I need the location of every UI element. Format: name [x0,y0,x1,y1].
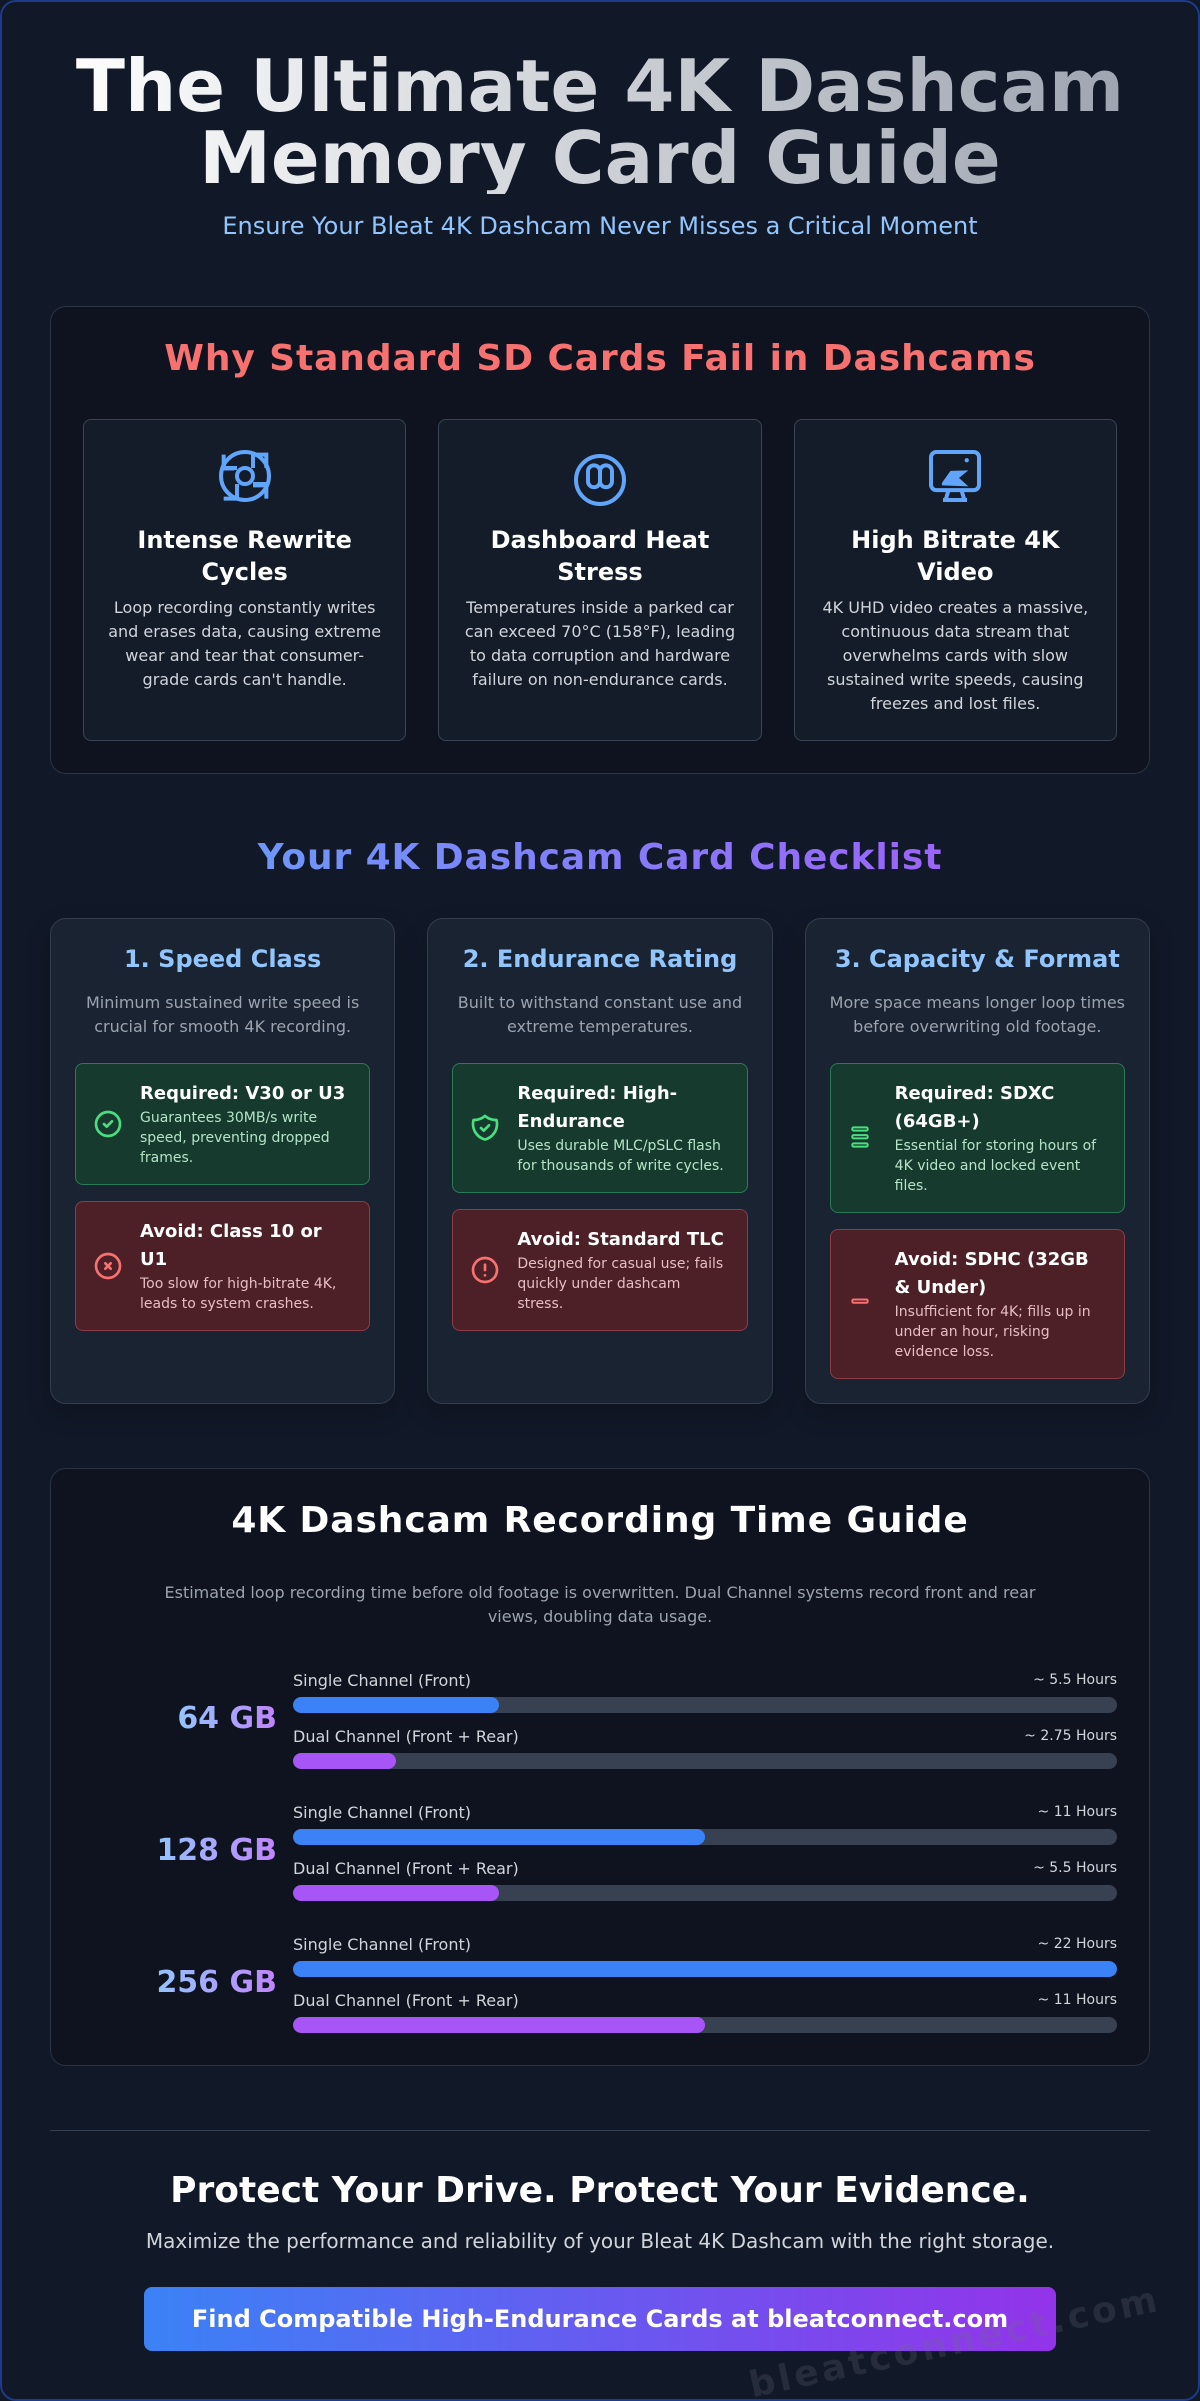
bars: Single Channel (Front) [293,1803,471,1822]
capacity label: 64 GB [177,1701,277,1736]
header [76,44,1124,240]
icon: rewrite cycles [219,450,271,502]
heading: why standard cards fail: Why Standard SD Cards Fail in Dashcams [164,338,1036,379]
icon: storage stack [851,1126,869,1148]
capacity label: 128 GB [156,1833,277,1868]
bars: Dual Channel (Front + Rear) [293,1859,519,1878]
bars [293,1671,1117,1769]
button [144,2287,1056,2351]
bars: Single Channel (Front) [293,1935,471,1954]
footer heading: Protect Your Drive. Protect Your Evidence. [170,2170,1030,2211]
bars: Dual Channel (Front + Rear) [293,1727,519,1746]
128 GB group [156,1803,1117,1901]
intro text: Estimated loop recording time before old footage is overwritten. Dual Channel systems record front and rear views, doubling data usage. [165,1583,1035,1626]
bars: Dual Channel (Front + Rear) [293,1991,519,2010]
card title: Dashboard Heat Stress [491,526,709,586]
heading: checklist [50,838,1150,878]
bars: ~ 11 Hours [1038,1804,1117,1820]
required box [830,1063,1125,1213]
required text: Uses durable MLC/pSLC flash for thousands of write cycles. [517,1138,724,1174]
avoid text [894,1249,1091,1360]
column text: More space means longer loop times before overwriting old footage. [830,993,1125,1036]
required text [140,1083,345,1166]
title: The Ultimate 4K Dashcam [76,44,1124,128]
column title: 2. Endurance Rating [463,945,737,973]
heading: checklist: Your 4K Dashcam Card Checklist [258,837,942,878]
button: Find Compatible High-Endurance Cards at bleatconnect.com [192,2305,1008,2333]
icon: single storage slot [851,1298,869,1304]
avoid box [830,1229,1125,1379]
icon: 4K monitor [929,450,981,502]
card title: High Bitrate 4K Video [851,526,1060,586]
title: Memory Card Guide [199,116,1001,200]
panel: recording time guide [50,1468,1150,2066]
required box [452,1063,748,1193]
64 GB group [177,1671,1117,1769]
avoid text: Designed for casual use; fails quickly under dashcam stress. [517,1256,723,1312]
footer call to action [50,2130,1150,2351]
icon: x circle [94,1252,122,1280]
avoid text: Avoid: Standard TLC [517,1229,724,1250]
avoid text [140,1221,336,1312]
required text [894,1083,1096,1194]
footer text: Maximize the performance and reliability of your Bleat 4K Dashcam with the right storage. [146,2229,1054,2253]
bars: Single Channel (Front) [293,1671,471,1690]
icon: heat [574,454,626,506]
reason cards [83,419,1117,741]
card: rewrite cycles [83,419,406,741]
card text: Temperatures inside a parked car can exceed 70°C (158°F), leading to data corruption and hardware failure on non-endurance cards. [465,598,735,689]
avoid text [517,1229,724,1312]
required text [517,1083,724,1174]
card text: 4K UHD video creates a massive, continuous data stream that overwhelms cards with slow sustained write speeds, causing freezes and lost files. [822,598,1088,713]
bars: ~ 22 Hours [1038,1936,1117,1952]
avoid box [452,1209,748,1331]
panel: speed class [50,918,395,1404]
bars: ~ 11 Hours [1038,1992,1117,2008]
card text: Loop recording constantly writes and erases data, causing extreme wear and tear that consumer-grade cards can't handle. [108,598,381,689]
avoid text: Too slow for high-bitrate 4K, leads to system crashes. [140,1276,336,1312]
bars [293,1935,1117,2033]
column text: Minimum sustained write speed is crucial for smooth 4K recording. [86,993,359,1036]
card title: Intense Rewrite Cycles [137,526,352,586]
heading: recording time: 4K Dashcam Recording Time Guide [231,1500,969,1541]
required text: Required: SDXC (64GB+) [895,1083,1054,1132]
bars: ~ 5.5 Hours [1033,1860,1117,1876]
icon: shield check [472,1114,498,1141]
icon: exclamation circle [472,1256,498,1284]
panel: endurance rating [427,918,773,1404]
avoid text: Avoid: SDHC (32GB & Under) [895,1249,1089,1298]
panel: capacity and format [805,918,1150,1404]
column text: Built to withstand constant use and extreme temperatures. [458,993,742,1036]
bar chart [156,1671,1117,2033]
required text: Required: V30 or U3 [140,1083,345,1104]
avoid text: Insufficient for 4K; fills up in under an hour, risking evidence loss. [895,1304,1091,1360]
required text: Required: High-Endurance [517,1083,677,1132]
icon: check circle [94,1110,122,1138]
bars: ~ 2.75 Hours [1024,1728,1117,1744]
column title: 3. Capacity & Format [835,945,1120,973]
column title: 1. Speed Class [124,945,321,973]
256 GB group [156,1935,1117,2033]
card: dashboard heat [438,419,762,741]
bars: ~ 5.5 Hours [1033,1672,1117,1688]
card: high bitrate [794,419,1117,741]
required box [75,1063,370,1185]
required text: Essential for storing hours of 4K video and locked event files. [895,1138,1096,1194]
title [50,50,1150,194]
required text: Guarantees 30MB/s write speed, preventing dropped frames. [140,1110,330,1166]
panel: why standard cards fail [50,306,1150,774]
avoid box [75,1201,370,1331]
subtitle: Ensure Your Bleat 4K Dashcam Never Misses a Critical Moment [222,212,978,240]
capacity label: 256 GB [156,1965,277,2000]
checklist columns [50,918,1150,1404]
bars [293,1803,1117,1901]
avoid text: Avoid: Class 10 or U1 [140,1221,322,1270]
